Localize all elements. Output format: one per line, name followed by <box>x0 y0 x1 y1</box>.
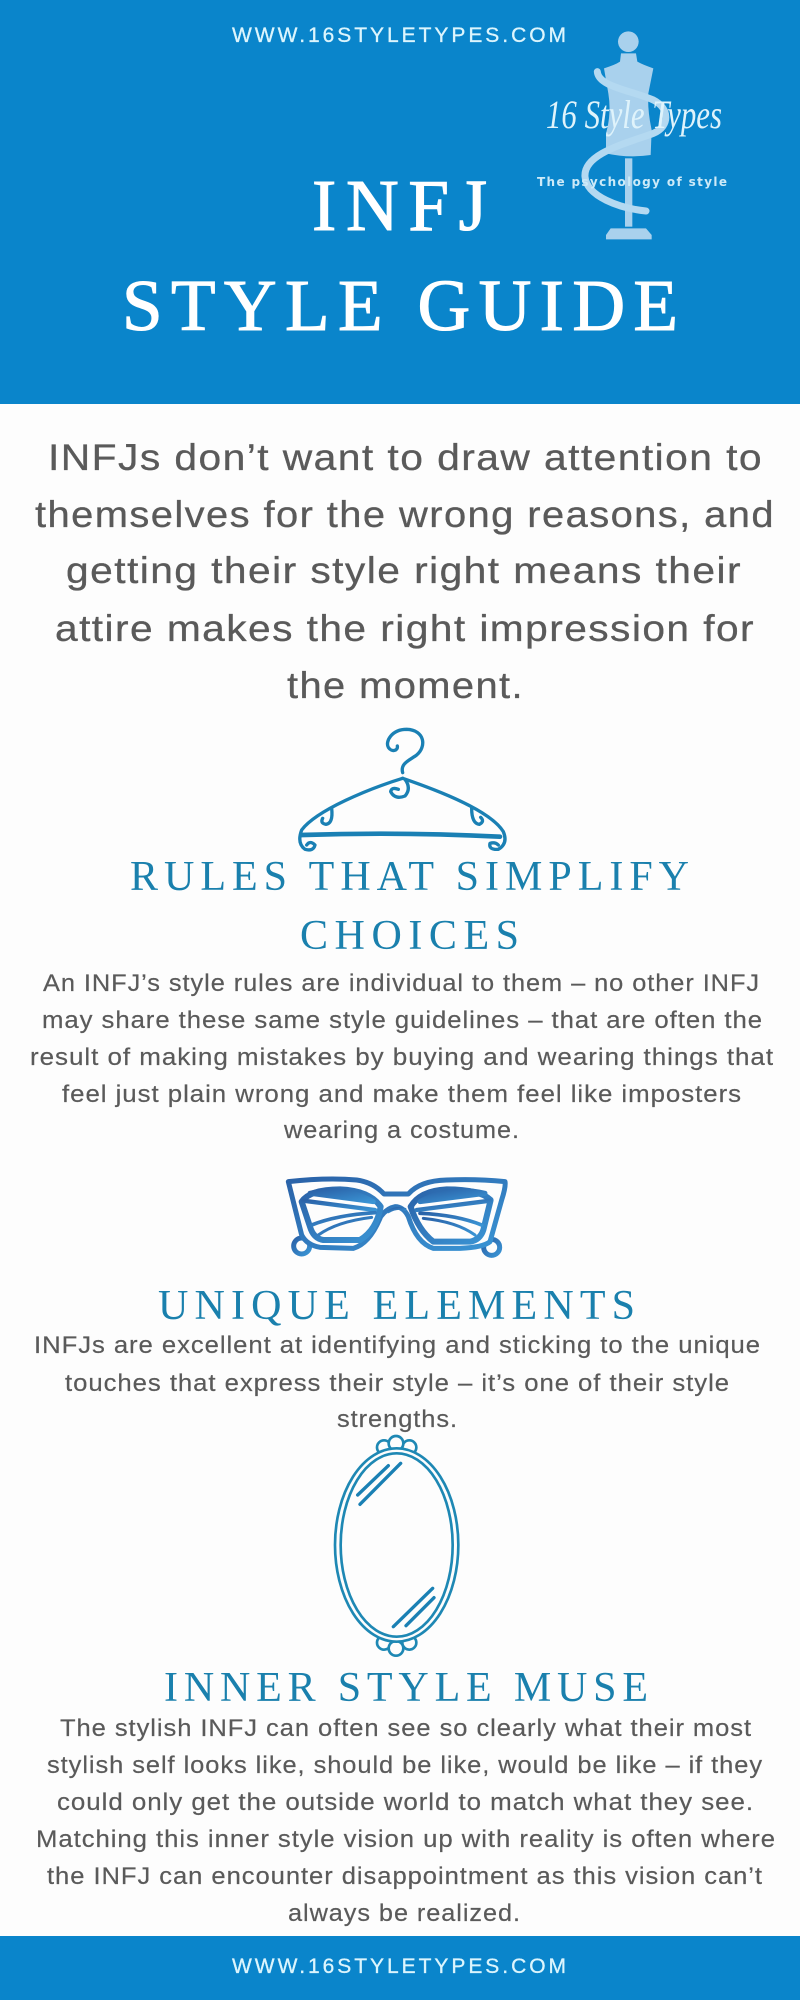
text block: inner style muse body: the INFJ can encounter disappointment as this vision can’t <box>47 1863 763 1890</box>
logo: dress form with brand text <box>537 31 727 239</box>
footer band <box>0 1936 800 2000</box>
text block: rules body <box>30 970 774 1144</box>
text block: inner style muse body <box>36 1715 776 1927</box>
intro paragraph: the moment. <box>287 665 524 706</box>
icon: glasses <box>288 1179 505 1255</box>
intro paragraph <box>35 437 775 706</box>
text block: rules body: An INFJ’s style rules are individual to them – no other INFJ <box>43 970 760 997</box>
panel: rules that simplify choices <box>30 729 774 1144</box>
heading: rules that simplify choices: RULES THAT SIMPLIFY <box>130 854 689 900</box>
heading: unique elements: UNIQUE ELEMENTS <box>158 1283 635 1329</box>
text block: rules body: result of making mistakes by buying and wearing things that <box>30 1044 774 1071</box>
panel: inner style muse <box>36 1436 776 1927</box>
text block: unique elements body: touches that express their style – it’s one of their style <box>65 1370 730 1397</box>
logo tagline: The psychology of style <box>537 175 727 189</box>
intro paragraph: getting their style right means their <box>66 550 742 591</box>
heading: rules that simplify choices <box>130 854 689 959</box>
title: STYLE GUIDE <box>122 265 678 346</box>
logo script name: 16 Style Types <box>546 92 722 137</box>
title <box>122 165 678 346</box>
website url top: WWW.16STYLETYPES.COM <box>232 24 566 47</box>
intro paragraph: attire makes the right impression for <box>55 608 755 649</box>
text block: inner style muse body: stylish self looks like, should be like, would be like – if they <box>47 1752 763 1779</box>
icon: mirror <box>335 1436 458 1656</box>
text block: inner style muse body: The stylish INFJ can often see so clearly what their most <box>60 1715 752 1742</box>
text block: unique elements body: strengths. <box>337 1406 458 1433</box>
website url bottom: WWW.16STYLETYPES.COM <box>232 1955 566 1978</box>
text block: rules body: feel just plain wrong and make them feel like imposters <box>62 1081 742 1108</box>
text block: rules body: may share these same style guidelines – that are often the <box>42 1007 763 1034</box>
header panel <box>0 0 800 404</box>
intro paragraph: INFJs don’t want to draw attention to <box>48 437 763 478</box>
heading: inner style muse: INNER STYLE MUSE <box>164 1665 648 1711</box>
icon: hanger <box>300 729 505 850</box>
icon: dress form <box>585 31 666 239</box>
title: INFJ <box>312 165 487 246</box>
panel: unique elements <box>34 1179 761 1433</box>
text block: rules body: wearing a costume. <box>283 1117 520 1144</box>
text block: unique elements body: INFJs are excellent at identifying and sticking to the unique <box>34 1332 761 1359</box>
intro paragraph: themselves for the wrong reasons, and <box>35 494 775 535</box>
heading: rules that simplify choices: CHOICES <box>300 913 519 959</box>
text block: inner style muse body: always be realized. <box>288 1900 521 1927</box>
text block: unique elements body <box>34 1332 761 1433</box>
text block: inner style muse body: could only get the outside world to match what they see. <box>57 1789 754 1816</box>
text block: inner style muse body: Matching this inner style vision up with reality is often where <box>36 1826 776 1853</box>
